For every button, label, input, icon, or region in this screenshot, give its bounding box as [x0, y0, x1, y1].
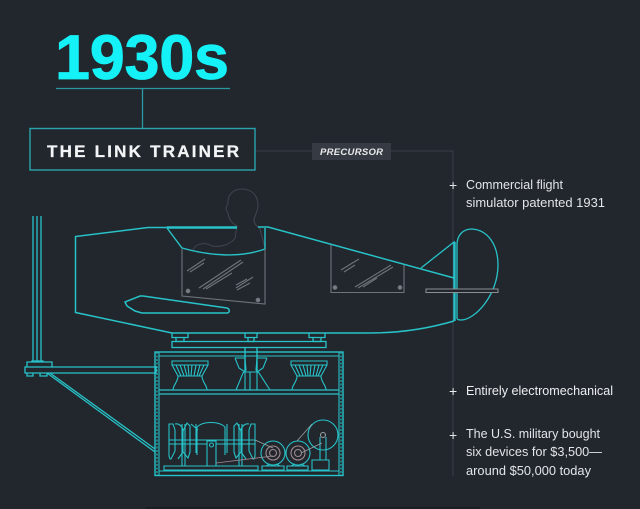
bullet: entirely electromechanical: + [449, 383, 457, 399]
front glass panel [182, 249, 265, 304]
bottom shelf: motor and organ bellows [164, 420, 338, 470]
bullet: US military bought six devices: around $50,000 today [466, 463, 591, 478]
bullet: entirely electromechanical: Entirely electromechanical [466, 383, 613, 398]
bullet: commercial flight simulator: + [449, 177, 457, 193]
title: 1930s: 1930s [55, 23, 229, 93]
heading box: the link trainer: THE LINK TRAINER [47, 142, 239, 161]
icon: pilot silhouette [193, 189, 265, 250]
rear glass panel [331, 245, 404, 292]
title underline and stem [56, 88, 230, 128]
control stick left [33, 216, 41, 361]
bullet: commercial flight simulator: Commercial flight [466, 177, 563, 192]
diagonal strut [47, 373, 155, 452]
heading box: the link trainer [30, 128, 255, 170]
illustration: link trainer [25, 189, 498, 476]
bullet: US military bought six devices: + [449, 427, 457, 443]
bullet: US military bought six devices [449, 426, 602, 478]
cabinet frame [155, 352, 343, 476]
bullet: commercial flight simulator: simulator patented 1931 [466, 195, 605, 210]
top shelf: bellows [172, 348, 327, 390]
stand base and beam [25, 361, 156, 376]
connector line: precursor to bullets [255, 151, 453, 476]
plane fuselage [76, 227, 454, 333]
shelf [159, 390, 339, 394]
tag: precursor: PRECURSOR [320, 147, 383, 158]
tag: precursor [312, 143, 391, 160]
cockpit opening [167, 228, 265, 255]
bullet: US military bought six devices: The U.S. military bought [466, 426, 600, 441]
tail fin and rudder [421, 242, 454, 278]
central column [245, 347, 257, 372]
horizontal stabilizer [426, 289, 498, 292]
bullet: US military bought six devices: six devices for $3,500— [466, 444, 602, 459]
wing [125, 296, 229, 313]
bullet: commercial flight simulator [449, 177, 605, 210]
mounts and plate [172, 333, 325, 342]
